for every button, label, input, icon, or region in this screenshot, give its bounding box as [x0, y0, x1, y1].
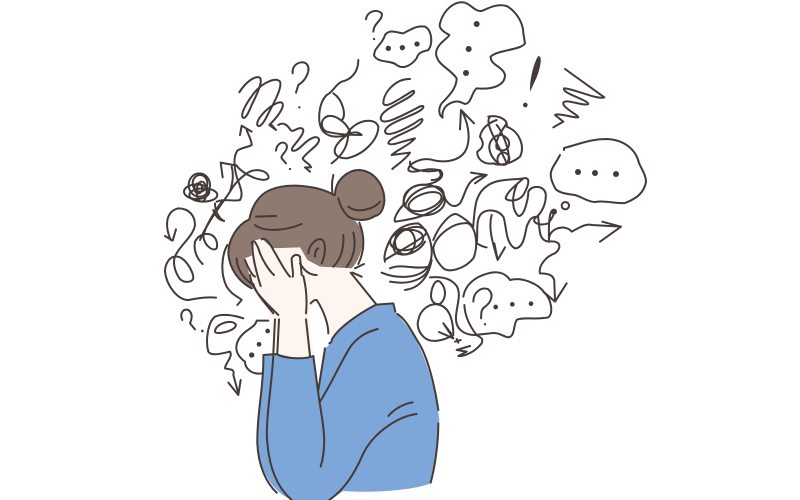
speech bubble small [374, 26, 431, 67]
exclamation mark [523, 56, 541, 107]
arrow up [408, 110, 474, 180]
sleeve outline [257, 354, 324, 500]
neck and shoulder lines [311, 273, 376, 390]
question mark small [276, 143, 291, 170]
sweater [257, 303, 439, 500]
scribble ball [184, 173, 217, 202]
tangled knot [477, 116, 522, 165]
squiggle [278, 124, 319, 172]
speech bubble lower [430, 272, 551, 356]
hair [228, 170, 384, 289]
lower scribble [382, 223, 432, 290]
skin: face, neck and hand [245, 238, 376, 360]
doodles: right side tangle [382, 162, 621, 356]
wave arrow down [477, 210, 538, 260]
arrow right squiggle [473, 178, 621, 242]
hand outline [250, 239, 307, 315]
speech bubble right [551, 139, 646, 203]
question mark top [366, 11, 382, 40]
arrow: rising squiggle [200, 126, 268, 240]
curling arrow with loop [165, 208, 216, 300]
hair outline and strands [228, 186, 364, 288]
scribble coil [381, 79, 423, 169]
big oval [433, 214, 476, 270]
hair strand [222, 245, 242, 305]
bun outline [332, 170, 384, 220]
small thought circles [552, 202, 569, 214]
speech bubble large [436, 2, 525, 118]
zigzag [553, 69, 604, 127]
woman [228, 170, 439, 500]
upper scribble [395, 162, 487, 222]
sweater outline [320, 303, 438, 500]
doodles: upper left [184, 60, 378, 240]
looping arrow down [207, 315, 243, 395]
zigzag arrow down [538, 218, 567, 302]
doodles: lower left [165, 202, 270, 395]
question mark lower left [181, 310, 204, 332]
question mark large [293, 62, 308, 108]
forearm lines [273, 319, 310, 356]
doodles: top [366, 2, 604, 180]
bulb loop [418, 281, 461, 343]
scribble: zigzag [239, 77, 283, 130]
ear [308, 239, 325, 263]
knot with loops [319, 60, 378, 163]
speech bubble behind arm [236, 321, 270, 374]
loop curve [195, 202, 224, 264]
